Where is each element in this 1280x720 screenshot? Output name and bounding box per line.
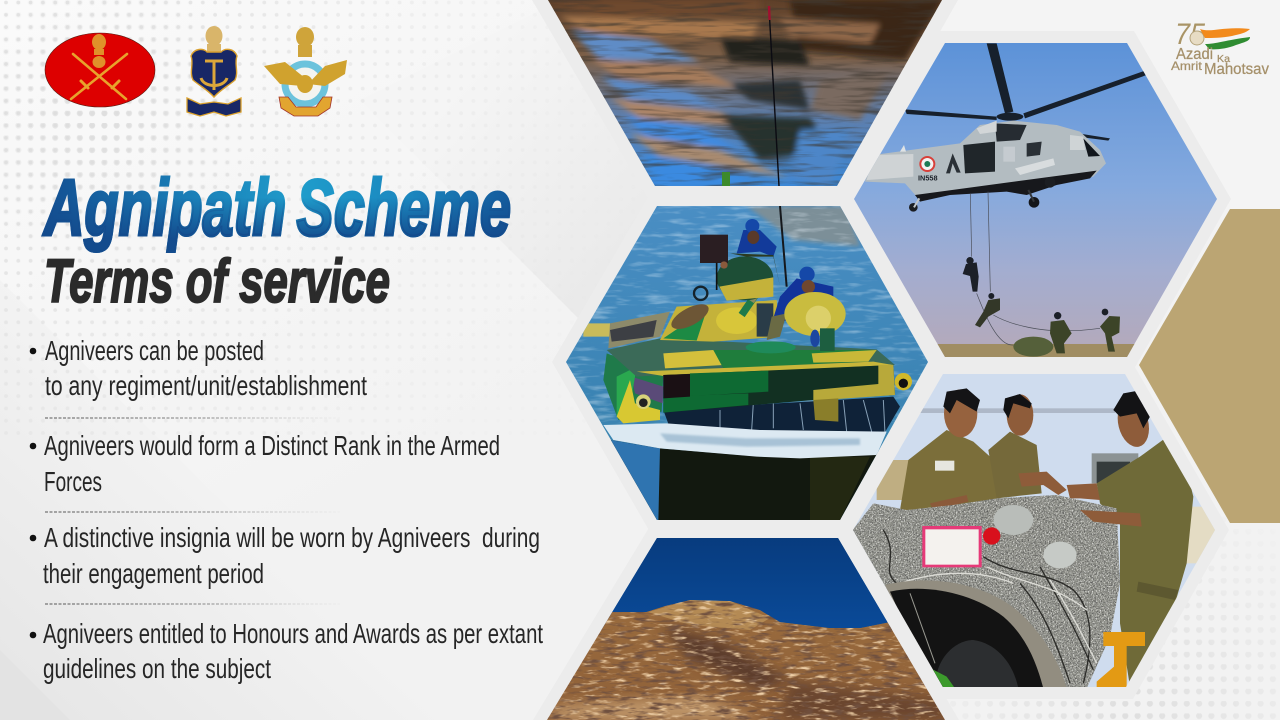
foam wave bbox=[603, 423, 887, 458]
rotor blades bbox=[905, 43, 1147, 141]
logo wordmark: Ka bbox=[1217, 54, 1230, 65]
yellow stand bbox=[1097, 632, 1145, 688]
bullet 2 bbox=[30, 430, 500, 497]
water curtain bbox=[663, 397, 900, 435]
engine body bbox=[850, 493, 1142, 690]
antenna bbox=[769, 6, 779, 186]
logo: Azadi Ka Amrit Mahotsav bbox=[1171, 18, 1269, 78]
ground bbox=[937, 337, 1137, 357]
title: Agnipath Scheme: Agnipath Scheme bbox=[43, 163, 511, 252]
front hull bbox=[663, 365, 895, 413]
technician middle bbox=[988, 394, 1067, 498]
front hatch bbox=[784, 292, 846, 336]
gold hexagon accent bbox=[1139, 209, 1280, 523]
soldier front bbox=[767, 267, 833, 340]
placard bbox=[922, 526, 982, 567]
rear hatch bbox=[717, 256, 773, 300]
logo flag bbox=[1200, 28, 1250, 49]
hull marking: IN558 bbox=[918, 173, 938, 182]
icon: army emblem bbox=[45, 33, 155, 107]
icon: navy emblem bbox=[187, 26, 241, 116]
sign board bbox=[700, 235, 728, 263]
photo: sea and earth bottom hexagon bbox=[540, 530, 960, 720]
turret bbox=[660, 300, 780, 342]
deck bbox=[607, 338, 895, 377]
title: Agnipath Scheme bbox=[43, 163, 511, 252]
bullet 3: their engagement period bbox=[43, 558, 264, 589]
yellow ring right bbox=[895, 373, 912, 390]
bullet 1: to any regiment/unit/establishment bbox=[45, 370, 367, 401]
logo chakra bbox=[1190, 31, 1204, 45]
roundel bbox=[919, 156, 935, 172]
bullet 3 bbox=[30, 522, 540, 589]
logo wordmark: Azadi bbox=[1176, 46, 1213, 63]
bullet 4: Agniveers entitled to Honours and Awards as per extant bbox=[43, 618, 543, 649]
bullet 4: guidelines on the subject bbox=[43, 653, 271, 684]
logo wordmark: Amrit bbox=[1171, 59, 1203, 73]
icon: air force emblem bbox=[264, 27, 347, 116]
logo numeral 75: 75 bbox=[1175, 18, 1205, 51]
soldier rear bbox=[720, 219, 780, 287]
logo wordmark: Mahotsav bbox=[1204, 61, 1269, 78]
technician left bbox=[900, 388, 1000, 517]
left rear deck bbox=[583, 323, 610, 337]
bullet 1: Agniveers can be posted bbox=[45, 335, 264, 366]
bullet 2: Agniveers would form a Distinct Rank in the Armed bbox=[44, 430, 500, 461]
antenna bbox=[780, 206, 787, 287]
soldiers bbox=[963, 257, 1120, 353]
intake ring bbox=[885, 580, 1067, 688]
hexagon frames bbox=[532, 0, 1231, 720]
title: Agnipath Scheme: Agnipath Scheme bbox=[43, 163, 511, 252]
bullet 2: Forces bbox=[44, 466, 102, 497]
gun bbox=[738, 298, 758, 318]
fuselage bbox=[865, 121, 1106, 212]
ropes bbox=[970, 192, 1100, 345]
technician right bbox=[1067, 391, 1193, 687]
photo: helicopter hexagon bbox=[850, 43, 1220, 359]
bullet 4 bbox=[30, 618, 543, 684]
photo: water reflection top hexagon bbox=[540, 0, 950, 190]
logo wordmark bbox=[1171, 46, 1269, 78]
red cap bbox=[983, 527, 1000, 545]
subtitle: Terms of service: Terms of service bbox=[44, 247, 390, 315]
photo: engine technicians hexagon bbox=[840, 370, 1220, 690]
photo: amphibious tank hexagon bbox=[560, 203, 937, 523]
landing gear bbox=[909, 203, 918, 212]
bullet 3: A distinctive insignia will be worn by Agniveers during bbox=[44, 522, 540, 553]
bullet 1 bbox=[30, 335, 367, 401]
reflection bbox=[610, 440, 880, 522]
left hull bbox=[603, 353, 663, 420]
